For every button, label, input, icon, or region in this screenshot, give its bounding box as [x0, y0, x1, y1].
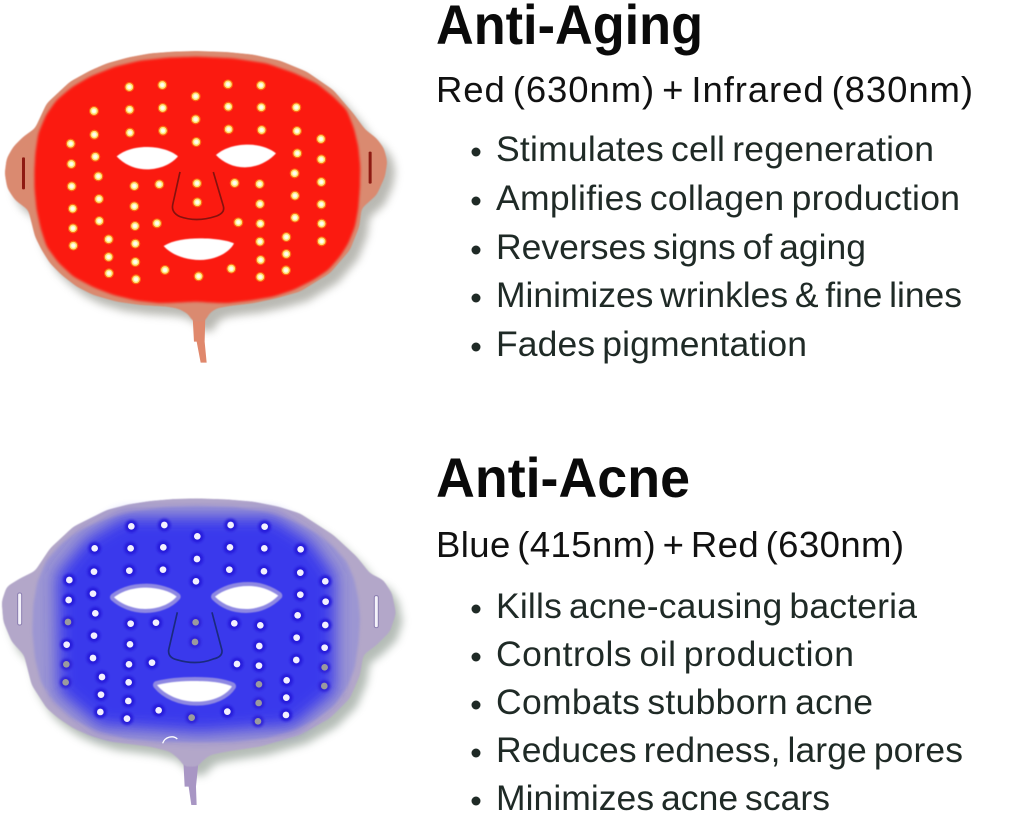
list: anti-aging benefits: Reverses signs of aging [496, 227, 866, 267]
nose outline [169, 612, 222, 662]
mask: red anti-aging [5, 51, 395, 363]
mask shadow [13, 60, 395, 331]
list: anti-aging benefits: Fades pigmentation [496, 324, 807, 364]
LED halos, unlit [62, 619, 328, 725]
LED halos [67, 81, 325, 283]
list: anti-acne benefits: Combats stubborn acne [496, 682, 873, 722]
mask body [2, 498, 396, 767]
list: anti-acne benefits: Reduces redness, large pores [496, 730, 963, 770]
ear slots [18, 593, 378, 628]
list: anti-aging benefits: Minimizes wrinkles & fine lines [496, 275, 962, 315]
ear slots [22, 152, 372, 189]
mask body [5, 51, 387, 322]
list: anti-aging benefits [472, 129, 962, 364]
mask shadow [8, 507, 403, 775]
power cable [183, 760, 199, 805]
list: anti-acne benefits: Controls oil production [496, 634, 854, 674]
list: anti-acne benefits [472, 586, 963, 818]
face cut-outs [117, 145, 276, 260]
list: anti-aging benefits: Stimulates cell regeneration [496, 129, 934, 169]
list: anti-acne benefits: Kills acne-causing bacteria [496, 586, 917, 626]
nose outline [172, 172, 224, 219]
list: anti-aging benefits: Amplifies collagen production [496, 178, 960, 218]
LED lights [63, 522, 329, 722]
face cut-outs [114, 586, 278, 702]
heading: Anti-Acne: Anti-Acne [436, 446, 690, 509]
unlit LEDs [62, 619, 328, 725]
mask: blue anti-acne [2, 498, 403, 805]
LED halos, lit [63, 522, 329, 722]
inner panel [32, 506, 360, 742]
power cable [193, 317, 207, 363]
red glow panel [34, 57, 360, 303]
rim of eye and mouth openings [114, 586, 278, 702]
LED lights [67, 81, 325, 283]
blue glow [57, 517, 335, 733]
list: anti-acne benefits: Minimizes acne scars [496, 778, 830, 818]
subheading: wavelengths for anti-acne: Blue (415nm) + Red (630nm) [436, 524, 904, 565]
cable port highlight [163, 737, 177, 743]
subheading: wavelengths for anti-aging: Red (630nm) + Infrared (830nm) [436, 69, 973, 110]
